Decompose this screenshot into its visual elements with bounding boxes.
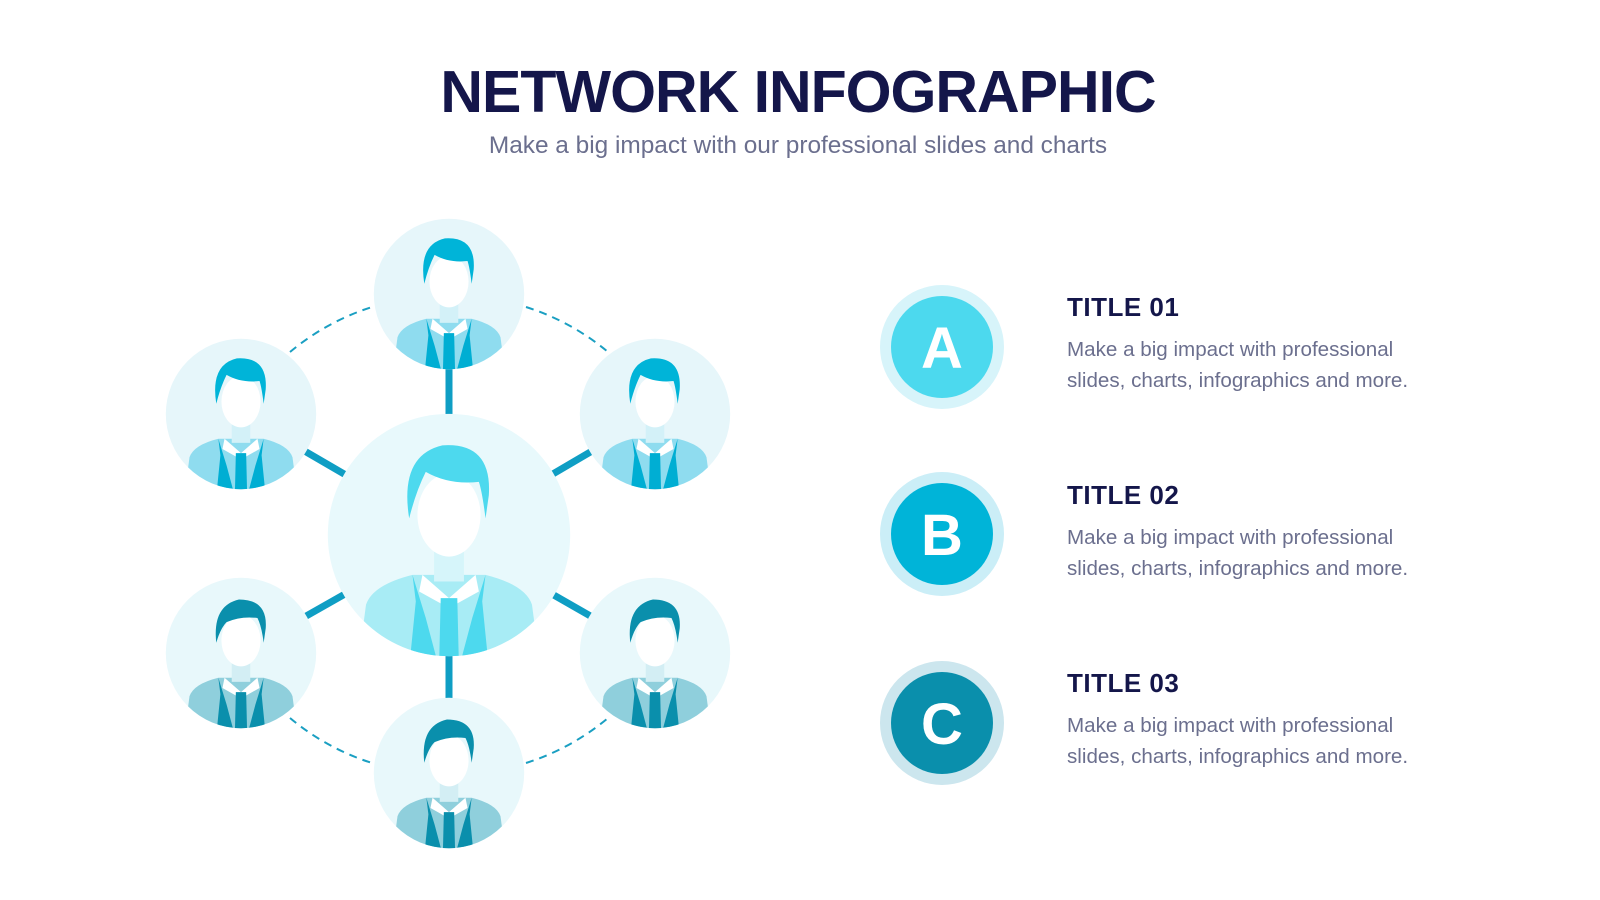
badge B: B bbox=[921, 503, 963, 568]
badge A bbox=[880, 285, 1004, 409]
badge C bbox=[880, 661, 1004, 785]
badge A: A bbox=[921, 316, 963, 381]
item 01: Make a big impact with professional bbox=[1067, 338, 1393, 361]
item 02 bbox=[1067, 480, 1408, 580]
person: upper right bbox=[580, 339, 730, 496]
item 01: TITLE 01 bbox=[1067, 292, 1179, 322]
item 01 bbox=[1067, 292, 1408, 392]
person: lower left bbox=[166, 578, 316, 735]
title: NETWORK INFOGRAPHIC bbox=[440, 59, 1156, 125]
badge B bbox=[880, 472, 1004, 596]
person: center bbox=[328, 414, 570, 668]
badge C: C bbox=[921, 692, 963, 757]
person: lower right bbox=[580, 578, 730, 735]
item 03 bbox=[1067, 668, 1408, 768]
network diagram bbox=[166, 218, 1004, 848]
subtitle: Make a big impact with our professional slides and charts bbox=[489, 132, 1107, 159]
person: top bbox=[374, 219, 524, 376]
item 02: slides, charts, infographics and more. bbox=[1067, 556, 1408, 580]
item 03: Make a big impact with professional bbox=[1067, 714, 1393, 737]
item 01: slides, charts, infographics and more. bbox=[1067, 368, 1408, 392]
item 02: TITLE 02 bbox=[1067, 480, 1179, 510]
item 02: Make a big impact with professional bbox=[1067, 526, 1393, 549]
item 03: slides, charts, infographics and more. bbox=[1067, 744, 1408, 768]
person: upper left bbox=[166, 339, 316, 496]
item 03: TITLE 03 bbox=[1067, 668, 1179, 698]
person: bottom bbox=[374, 698, 524, 855]
